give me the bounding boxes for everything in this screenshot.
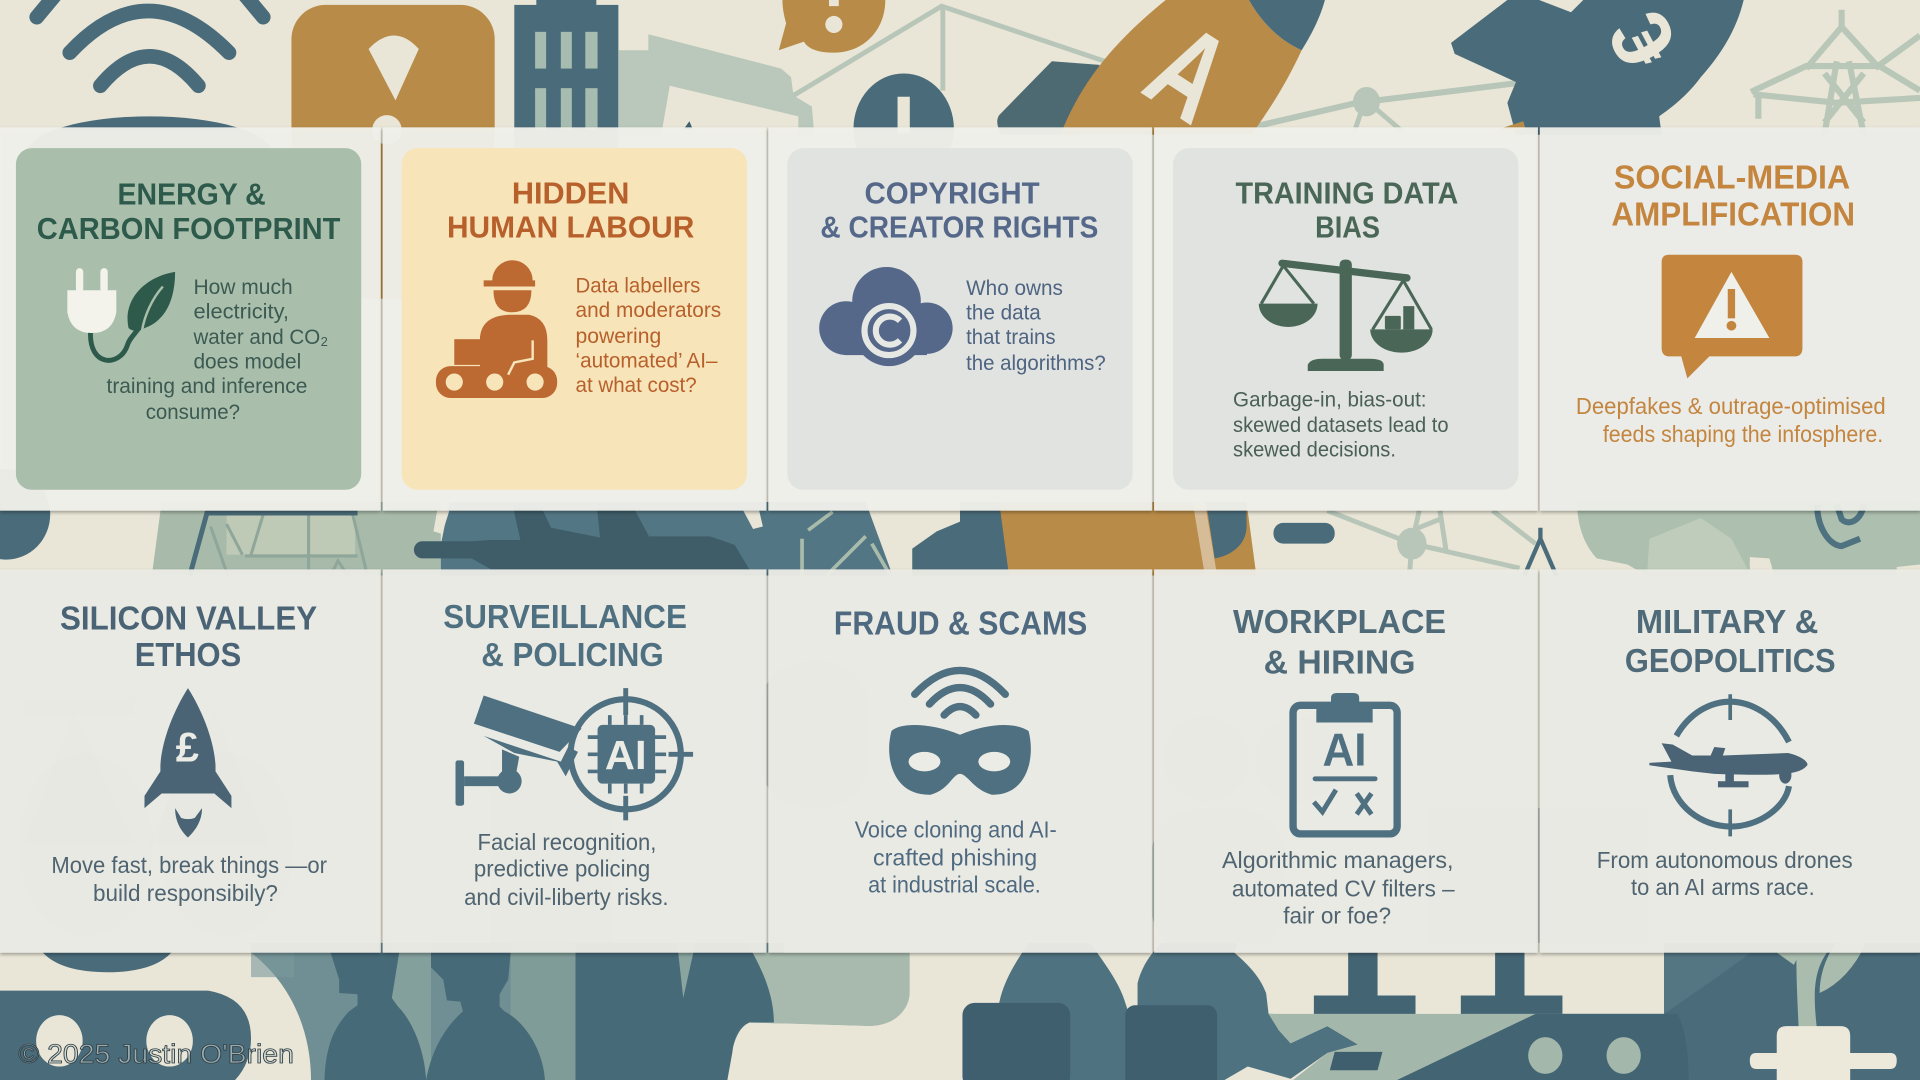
icon: warning speech bubble — [1662, 255, 1802, 378]
card background: grey — [1173, 148, 1518, 490]
icon: wifi arcs — [27, 0, 272, 190]
body text: that trains — [966, 325, 1056, 349]
heading: FRAUD & SCAMS — [834, 605, 1087, 642]
faint pale shapes behind lower cards — [18, 661, 1647, 955]
panel: military and geopolitics — [1540, 569, 1920, 953]
heading — [1233, 604, 1446, 681]
icon: office building — [514, 0, 618, 152]
heading: ENERGY & — [118, 177, 266, 211]
heading: WORKPLACE — [1233, 604, 1446, 641]
body text: training and inference — [107, 374, 307, 398]
heading: TRAINING DATA — [1236, 176, 1458, 210]
icon: teal rocket with euro — [1451, 0, 1744, 135]
body text — [855, 817, 1057, 898]
heading — [443, 599, 687, 674]
body text — [576, 274, 721, 397]
body text: From autonomous drones — [1597, 847, 1853, 873]
body text: build responsibily? — [93, 880, 278, 906]
body text: Data labellers — [576, 274, 700, 298]
network lines — [793, 6, 1516, 132]
heading — [37, 177, 341, 246]
body text: Move fast, break things —or — [51, 852, 327, 878]
icon: ochre speech bubble — [779, 0, 885, 53]
heading — [1611, 160, 1855, 233]
body text: at industrial scale. — [868, 872, 1041, 898]
panel: copyright and creator rights — [768, 127, 1152, 511]
body text: skewed datasets lead to — [1233, 413, 1449, 437]
icon: teal info circle — [853, 73, 954, 184]
body text — [966, 276, 1106, 375]
body text: feeds shaping the infosphere. — [1603, 421, 1883, 447]
heading — [60, 600, 317, 674]
heading: & CREATOR RIGHTS — [820, 211, 1098, 245]
heading: SOCIAL-MEDIA — [1614, 160, 1850, 197]
middle strip shapes — [0, 469, 1920, 576]
icon: camera and AI target: AI — [605, 732, 647, 778]
body text: How much — [193, 275, 293, 299]
panel: surveillance and policing — [383, 569, 767, 953]
heading: SILICON VALLEY — [60, 600, 317, 637]
body text: Who owns — [966, 276, 1063, 300]
body text: crafted phishing — [873, 845, 1037, 871]
heading: MILITARY & — [1636, 604, 1818, 641]
icon: drone in crosshair — [1649, 694, 1807, 836]
body text: and moderators — [576, 298, 721, 322]
card background: green — [16, 148, 361, 490]
icon: camera and AI target — [456, 688, 693, 820]
body text: and civil-liberty risks. — [464, 884, 669, 910]
heading: CARBON FOOTPRINT — [37, 212, 341, 246]
heading: & POLICING — [481, 637, 664, 674]
icon: sage pump — [618, 34, 814, 135]
body text — [464, 829, 669, 910]
body text: the data — [966, 301, 1041, 325]
card background: yellow — [402, 148, 747, 490]
body text — [107, 275, 328, 424]
heading — [447, 176, 694, 245]
panel: silicon valley ethos — [0, 569, 381, 953]
body text: skewed decisions. — [1233, 438, 1396, 462]
copyright notice: © 2025 Justin O'Brien — [18, 1039, 294, 1069]
heading: SURVEILLANCE — [443, 599, 687, 636]
panel: fraud and scams — [768, 569, 1152, 953]
body text — [1222, 847, 1455, 928]
body text: water and CO₂ — [193, 325, 328, 349]
body text — [51, 852, 327, 906]
body text: predictive policing — [474, 856, 650, 882]
heading — [1625, 604, 1836, 680]
heading: COPYRIGHT — [864, 176, 1040, 210]
icon: plug and leaf — [67, 268, 175, 360]
heading: & HIRING — [1264, 644, 1416, 681]
body text: Garbage-in, bias-out: — [1233, 388, 1427, 412]
icon: cloud copyright — [819, 267, 953, 366]
body text: Voice cloning and AI- — [855, 817, 1057, 843]
icon: tilted scales — [1259, 260, 1433, 371]
heading — [1236, 176, 1458, 245]
icon: conveyor worker — [436, 260, 557, 398]
panel: training data bias — [1154, 127, 1538, 511]
icon: rocket with pound — [144, 688, 231, 838]
heading: ETHOS — [135, 637, 241, 674]
heading: GEOPOLITICS — [1625, 643, 1836, 680]
card background: grey — [787, 148, 1133, 490]
heading — [820, 176, 1098, 245]
heading: HUMAN LABOUR — [447, 211, 694, 245]
body text: consume? — [146, 400, 240, 424]
body text: does model — [193, 350, 301, 374]
panel: social media amplification — [1540, 127, 1920, 511]
icon: ochre rocket with letter — [997, 0, 1325, 150]
icon: rocket with pound: £ — [176, 724, 199, 771]
body text: fair or foe? — [1283, 902, 1391, 928]
body text: Algorithmic managers, — [1222, 847, 1453, 873]
body text — [1576, 393, 1886, 447]
body text: at what cost? — [576, 373, 697, 397]
panel: workplace and hiring — [1154, 569, 1538, 953]
body text: automated CV filters – — [1232, 875, 1455, 901]
body text: to an AI arms race. — [1631, 874, 1815, 900]
icon: AI clipboard — [1293, 693, 1397, 834]
heading: HIDDEN — [512, 176, 629, 210]
icon: pylon top — [1751, 10, 1920, 135]
heading: AMPLIFICATION — [1611, 196, 1855, 233]
body text: powering — [576, 324, 661, 348]
body text — [1597, 847, 1853, 900]
body text: Deepfakes & outrage-optimised — [1576, 393, 1886, 419]
heading: BIAS — [1315, 211, 1380, 245]
body text: Facial recognition, — [478, 829, 656, 855]
panel: hidden human labour — [383, 127, 767, 511]
body text: electricity, — [193, 299, 289, 323]
panel: energy and carbon footprint — [0, 127, 381, 511]
icon: AI clipboard: AI — [1322, 723, 1367, 775]
body text — [1233, 388, 1449, 462]
icon: mask with signal — [889, 670, 1031, 795]
body text: ‘automated’ AI– — [576, 348, 718, 372]
icon: ochre rocket with letter: A — [1123, 0, 1254, 150]
body text: the algorithms? — [966, 351, 1106, 375]
icon: ochre alert tile — [291, 5, 495, 299]
bottom strip shapes — [0, 943, 1920, 1080]
